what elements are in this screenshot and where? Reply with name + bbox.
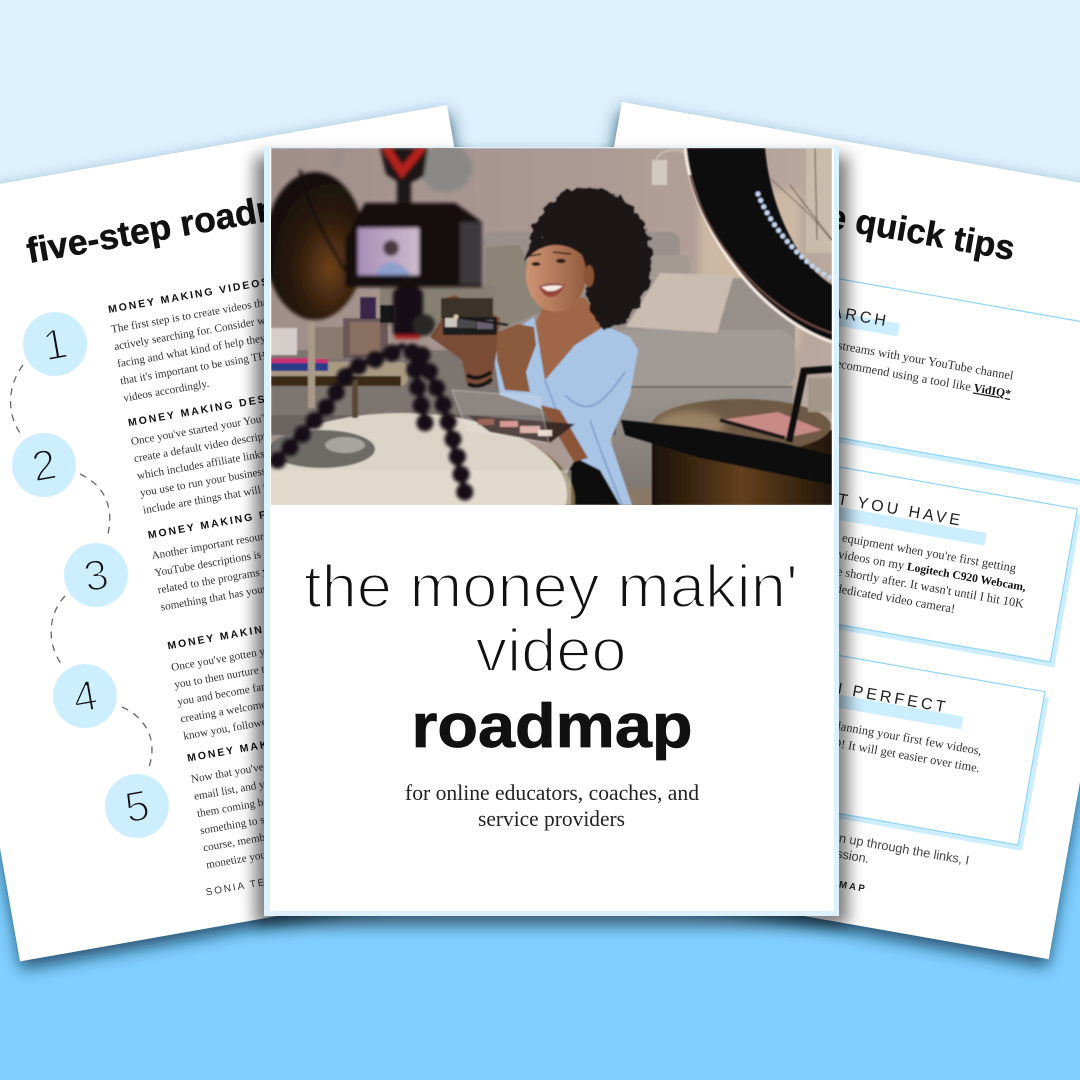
step 3 text: MONEY MAKING FREEBIES — [147, 498, 328, 542]
step 2 circle — [12, 433, 76, 497]
blurred foreground — [265, 144, 482, 503]
tip box 1: Monetize your streams with your YouTube channel — [762, 325, 1015, 383]
eyeshadow palette — [441, 298, 493, 318]
tip box 3: JUST HIT RECORD! It will get easier over time. — [737, 719, 981, 775]
step 1 circle: 1 — [39, 319, 71, 371]
step 3 text — [147, 495, 357, 614]
step 1 text: The first step is to create videos that your audience is — [110, 283, 347, 336]
step 4 circle — [53, 664, 117, 728]
line: video: video — [476, 617, 626, 684]
panel: right page quick tips — [488, 102, 1080, 959]
neck — [536, 297, 603, 380]
cover title — [304, 553, 798, 761]
sofa — [482, 232, 680, 332]
heading: five-step roadmap: five-step roadmap — [23, 179, 331, 271]
step 4 text: Once you've gotten your viewers to subscribe, it's time for — [170, 617, 429, 674]
camera screen — [358, 228, 419, 275]
step 3 text: something that has your audience subscribe. — [160, 567, 357, 614]
small mirror on table — [269, 430, 375, 468]
step 5 text: email list, and you've given them reasons to keep — [193, 753, 412, 803]
step 5 circle: 5 — [121, 781, 153, 833]
tip box 2: started. I filmed my videos on my Logitech C920 Webcam, — [738, 530, 1027, 594]
face — [526, 236, 586, 312]
tip box 2: that I got a dedicated video camera! — [779, 571, 956, 616]
step 2 text: which includes affiliate links to the tools — [136, 439, 317, 482]
step 5 text: something to sell them, like an online — [199, 796, 367, 837]
step 2 text: Once you've started your YouTube channel, you'll want to — [130, 391, 388, 448]
step 2 text: include are things that will help viewers. — [142, 473, 323, 517]
page footer: VIDEO ROADMAP — [755, 865, 868, 895]
step 4 text: MONEY MAKING EMAILS — [167, 612, 331, 652]
step 5 text — [186, 715, 424, 871]
round mirror back — [265, 172, 365, 320]
step 4 text: you and become familiar with your work by — [176, 662, 373, 708]
ring light — [685, 148, 832, 342]
cover subtitle: service providers — [478, 806, 625, 831]
step 3 circle: 3 — [80, 550, 112, 602]
cover subtitle: for online educators, coaches, and — [405, 780, 699, 805]
tip box 2: then used my iPhone shortly after. It wasn't until I hit 10K — [739, 547, 1025, 611]
step 5 text: MONEY MAKING OFFERS — [186, 724, 353, 765]
step 2 text — [127, 372, 400, 517]
step 5 text: them coming back, it's time to have — [196, 781, 355, 820]
tripod legs — [276, 352, 467, 503]
tip box 3: Don't get hung up planning your first few videos, — [740, 702, 983, 758]
panel: left page five-step roadmap — [0, 105, 580, 961]
step 5 text: course, membership or service to help — [202, 813, 372, 854]
step 4 text: you to then nurture them so they get to know — [173, 644, 374, 691]
woman blouse — [492, 317, 638, 505]
step 1 text: that it's important to be using THEIR words and title — [119, 335, 353, 387]
step 5 text: Now that you've grown your channel and your — [190, 738, 397, 786]
camera body — [345, 203, 482, 287]
step 3 circle — [64, 543, 128, 607]
step 3 text: Another important resource to add to your — [151, 518, 339, 562]
tip box 2: USE WHAT YOU HAVE — [742, 474, 964, 530]
pillows — [626, 273, 734, 333]
heading: quick tips: three quick tips — [760, 186, 1018, 268]
step 4 text: creating a welcome email sequence to get to — [179, 679, 377, 725]
step 2 text: you use to run your business. The links you — [139, 454, 333, 499]
step 1 text: videos accordingly. — [122, 378, 210, 405]
tip box 2 — [588, 427, 1080, 668]
tip box 2: You don't need fancy equipment when you're first getting — [735, 512, 1017, 575]
forearm — [540, 405, 588, 462]
pants — [566, 459, 620, 505]
left hand and wrist — [430, 295, 500, 385]
tip box 3 — [555, 610, 1050, 851]
step 4 text: know you, followed by regular newsletters. — [182, 697, 376, 743]
tip box 1 — [619, 245, 1080, 486]
line: roadmap: roadmap — [412, 692, 692, 761]
left side table and items — [271, 362, 408, 386]
step 2 text: MONEY MAKING DESCRIPTIONS — [127, 380, 342, 429]
step 1 text: actively searching for. Consider what problems they're — [113, 299, 356, 353]
black frame — [621, 420, 832, 485]
step 2 circle: 2 — [28, 440, 60, 492]
disclosure note: earn a commission. — [760, 833, 870, 866]
step 5 circle — [105, 774, 169, 838]
step 3 text: YouTube descriptions is a free lead magnet — [154, 534, 347, 579]
disclosure note — [760, 818, 970, 883]
step 4 text — [167, 595, 442, 743]
right hand — [497, 324, 536, 392]
cover subtitle — [405, 780, 699, 831]
marble table — [536, 446, 576, 505]
disclosure note: *If you sign up through the links, I — [783, 821, 970, 868]
tripod head — [393, 287, 423, 339]
step 2 text: create a default video description template — [133, 420, 322, 465]
pink palette — [720, 412, 822, 438]
step 1 text — [107, 262, 365, 405]
makeup palette with clear lid — [467, 415, 575, 443]
step 1 text: facing and what kind of help they need. Remember — [116, 319, 344, 370]
microphone — [420, 144, 472, 192]
line: the money makin': the money makin' — [304, 553, 798, 620]
background bottom — [0, 540, 1080, 1080]
page footer: SONIA TEACHES — [205, 869, 310, 898]
tip box 1: I highly recommend using a tool like VidIQ* — [789, 348, 1012, 401]
step 1 circle — [23, 312, 87, 376]
hair — [528, 186, 652, 328]
panel: center cover page — [235, 144, 839, 916]
step 1 text: MONEY MAKING VIDEOS — [107, 276, 271, 316]
step 3 text: related to the programs you offer, or — [157, 557, 318, 596]
tip box 3: BETTER THAN PERFECT — [700, 656, 950, 717]
tip box 1: RESEARCH — [775, 294, 890, 331]
background top — [0, 0, 1080, 540]
right table — [621, 148, 832, 505]
center page shadow — [255, 156, 848, 926]
dashed roadmap connectors — [11, 365, 152, 770]
step 4 circle: 4 — [69, 671, 101, 723]
photo: woman filming makeup video — [271, 148, 832, 505]
step 5 text: monetize your videos. — [205, 842, 305, 871]
